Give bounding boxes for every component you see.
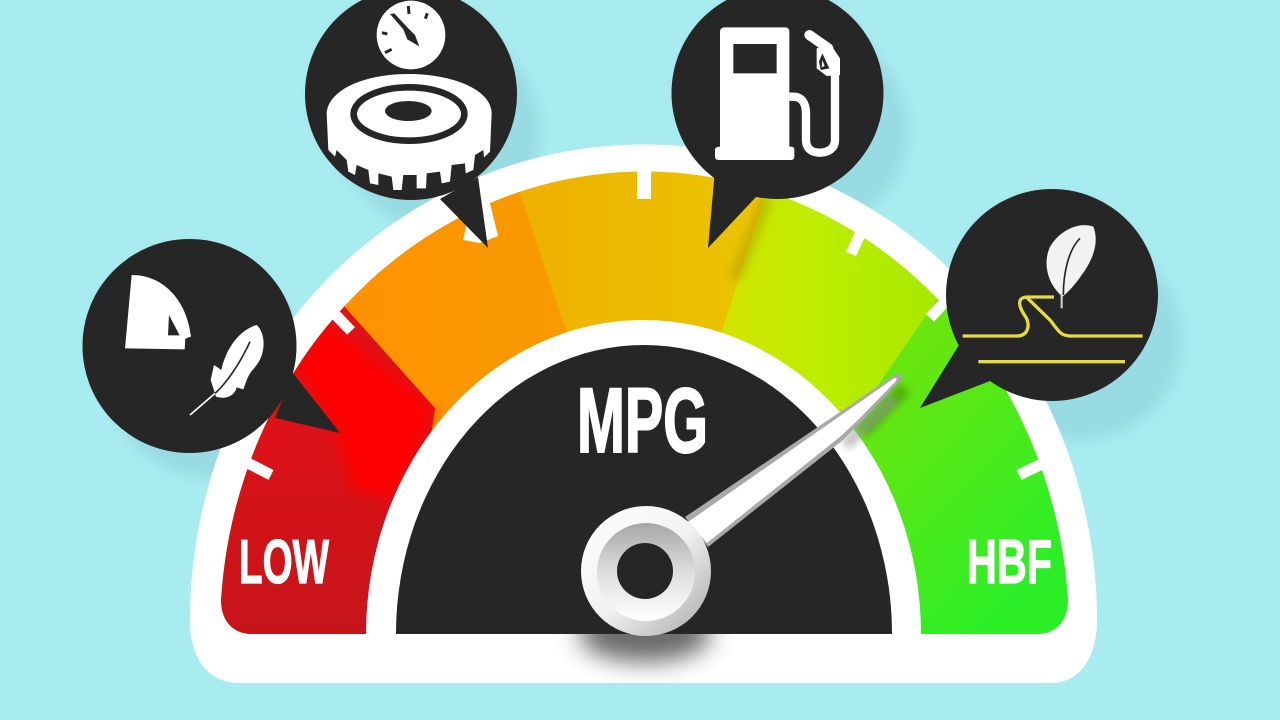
icon: feather [1047,225,1096,308]
callout: aerodynamics and light weight [82,239,340,453]
icon: tyre [327,74,492,190]
needle shadow on ring [845,398,895,445]
bubble [305,0,517,248]
heading: MPG: MPG [577,370,708,472]
white gauge housing [190,144,1097,683]
callout: road and light weight [920,189,1158,408]
hub [581,506,711,636]
shadow under hub [579,606,711,662]
bubble [672,0,884,248]
label: LOW: LOW [239,528,329,597]
callout: tyre pressure [305,0,517,248]
bubble [920,189,1158,408]
gauge body [190,144,1100,683]
icon: fuel pump [715,27,840,160]
icon: feather [190,325,264,415]
icon: car silhouette [125,275,191,349]
needle [685,374,901,547]
callout: fuel pump [672,0,884,248]
icon: pressure gauge [377,1,445,69]
label: HBF: HBF [967,528,1052,597]
inner white ring [366,320,921,640]
icon: road lines [963,297,1143,362]
needle and hub [581,374,901,636]
black dial face [396,345,892,634]
coloured scale band [221,172,1068,634]
scale ticks [240,168,1052,475]
bubble cast shadows [190,93,1082,378]
tick behind tyre callout [463,203,498,243]
bubble [82,239,340,453]
